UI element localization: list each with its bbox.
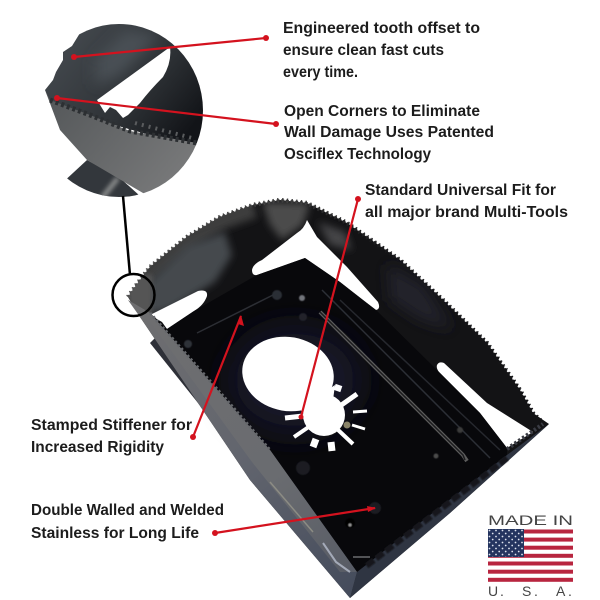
magnified highlight [95, 30, 160, 85]
screw in hole [344, 422, 350, 428]
text: double walled [31, 502, 224, 542]
magnified grey band [45, 90, 197, 194]
floor [150, 258, 507, 572]
made in usa logo [488, 512, 573, 599]
rear wall strip [150, 337, 214, 418]
text: engineered tooth offset [283, 20, 480, 81]
text: engineered tooth offset: every time. [283, 64, 358, 81]
magnified band teeth [50, 100, 197, 143]
blade teeth [128, 200, 543, 423]
text: open corners: Wall Damage Uses Patented [284, 124, 494, 141]
text: double walled: Stainless for Long Life [31, 525, 199, 542]
text: stamped stiffener: Increased Rigidity [31, 439, 164, 456]
floor bluish glow [227, 324, 363, 436]
text: standard universal fit [365, 182, 568, 221]
mounting hole [236, 330, 367, 451]
text: engineered tooth offset: ensure clean fast cuts [283, 42, 444, 59]
wall slot chevron [252, 220, 379, 310]
magnified tooth specks [135, 123, 192, 138]
arrow: tooth offset [71, 35, 269, 60]
screws [184, 290, 463, 528]
right band teeth [507, 424, 543, 449]
text: double walled: Double Walled and Welded [31, 502, 224, 519]
arrow: open corners [54, 95, 279, 127]
wall highlights [125, 202, 453, 330]
zoom leader line [123, 196, 130, 275]
text: stamped stiffener: Stamped Stiffener for [31, 417, 192, 434]
wall slot left [150, 291, 207, 329]
magnifier detail [45, 24, 203, 197]
tool blade photo [125, 200, 549, 598]
mounting slots [285, 385, 367, 451]
magnified lower piece [67, 160, 138, 197]
magnified lower piece glint [102, 178, 118, 198]
magnified white opening [97, 47, 170, 118]
logo footer: U. S. A. [488, 583, 572, 599]
band teeth [150, 313, 270, 450]
text: open corners: Osciflex Technology [284, 146, 431, 163]
text: standard universal fit: Standard Universal Fit for [365, 182, 556, 199]
stiffener lines [197, 290, 500, 557]
weld lines [270, 482, 350, 572]
logo heading: MADE IN [488, 512, 573, 528]
text: open corners: Open Corners to Eliminate [284, 103, 480, 120]
text: open corners [284, 103, 494, 163]
lower right inner speckle [365, 458, 507, 567]
zoom target circle [112, 274, 154, 316]
arrow: double wall [212, 506, 376, 536]
magnified dark upper blade [45, 24, 203, 146]
callout arrows [54, 35, 376, 536]
wall slot right [437, 362, 533, 448]
text: standard universal fit: all major brand Multi-Tools [365, 204, 568, 221]
arrow: universal fit [298, 196, 361, 420]
blade silhouette [128, 200, 549, 598]
front edge grey band [128, 300, 357, 572]
arrow: stiffener [190, 315, 244, 440]
text: engineered tooth offset: Engineered tooth offset to [283, 20, 480, 37]
outer band strip [128, 300, 357, 598]
lower right edge strip [350, 424, 549, 598]
usa flag [488, 529, 573, 582]
text: stamped stiffener [31, 417, 192, 456]
